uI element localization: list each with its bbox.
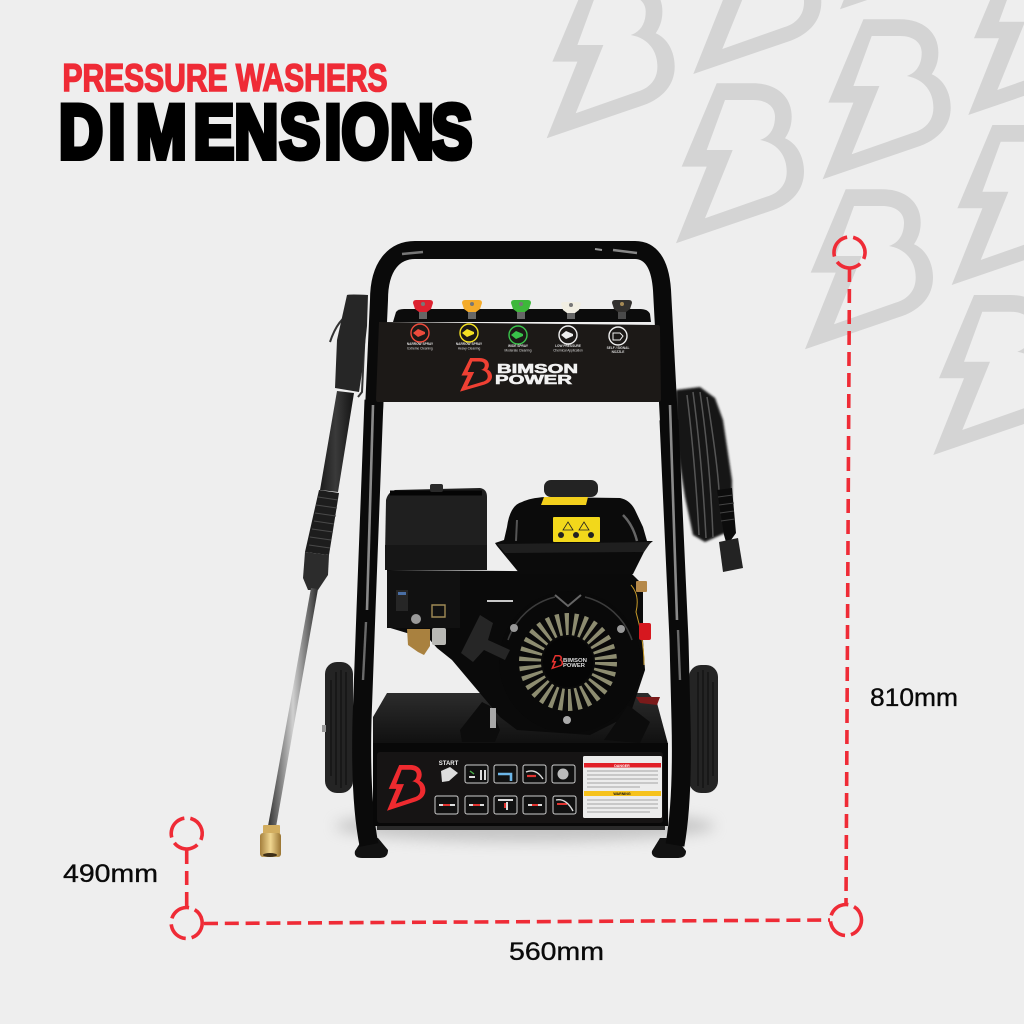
safety label card	[583, 756, 662, 818]
engine	[385, 480, 660, 743]
foot left	[355, 838, 388, 858]
ground shadow	[335, 810, 715, 842]
right wheel	[689, 665, 718, 793]
base plate	[373, 693, 668, 744]
panel lower edge	[377, 826, 665, 830]
title	[59, 57, 472, 175]
bottom control panel	[373, 743, 668, 830]
yellow warning label	[553, 517, 600, 542]
left wheel	[322, 662, 353, 793]
ribbed grip	[305, 490, 339, 555]
spray icon: green: WIDE SPRAY	[508, 344, 529, 348]
label: 810mm: 810mm	[870, 684, 958, 712]
safety label card: DANGER	[614, 764, 630, 768]
grip end cap	[303, 552, 329, 590]
nozzle: white	[561, 302, 581, 319]
red hose fitting	[636, 697, 660, 705]
spray icon: black nozzle: SELF / SIGNAL	[607, 346, 629, 350]
background pattern: logo B marks	[547, 0, 1024, 455]
nozzle: black	[612, 300, 632, 319]
title line: dimensions: DIMENSIONS	[59, 90, 472, 175]
spray icon: red	[407, 324, 434, 350]
yellow strip label	[541, 497, 588, 505]
hose coil	[676, 387, 743, 572]
logo: wordmark: POWER	[495, 372, 573, 387]
label: 560mm: 560mm	[509, 938, 604, 966]
pressure washer product	[260, 249, 743, 858]
spray icon: red: Extreme Cleaning	[407, 346, 433, 350]
spray icon: green	[505, 326, 532, 352]
spray icon: white: LOW PRESSURE	[555, 344, 581, 348]
hub logo: POWER	[563, 663, 585, 669]
nozzle: green	[511, 300, 531, 319]
nozzle: red	[413, 300, 433, 319]
step icons	[435, 765, 576, 814]
engine block silhouette	[387, 570, 645, 735]
spray icon: yellow: Heavy Cleaning	[458, 346, 480, 350]
engine mount left	[460, 702, 500, 742]
hose strain relief	[717, 488, 736, 542]
logo: B mark	[387, 765, 425, 811]
carburettor housing	[387, 571, 460, 628]
yellow wire	[631, 585, 644, 665]
trigger handle	[335, 294, 368, 392]
grey fuel bowl	[432, 628, 446, 645]
frame tube	[362, 249, 681, 845]
foot right	[652, 838, 686, 858]
lance upper tube	[320, 391, 354, 492]
dimension: depth line with circles	[167, 814, 206, 941]
hook bracket	[330, 313, 365, 397]
hose end connector	[719, 538, 743, 572]
carburettor label	[396, 590, 445, 617]
crankcase badge	[487, 600, 513, 602]
nozzle: yellow	[462, 300, 482, 319]
spray icon: black nozzle	[607, 327, 629, 354]
spray icon: yellow	[456, 324, 483, 350]
pull handle	[461, 615, 510, 662]
hub logo: BIMSON	[563, 658, 587, 664]
fuel tank	[495, 480, 653, 574]
recoil starter	[499, 591, 641, 733]
engine mount right	[604, 705, 650, 743]
spray icon: white: Chemical Application	[553, 348, 583, 352]
title line: pressure washers: PRESSURE WASHERS	[62, 57, 388, 100]
brass fuel fitting	[407, 629, 430, 655]
spray icon: red: NARROW SPRAY	[407, 342, 434, 346]
spray icon: black nozzle: NOZZLE	[612, 350, 624, 354]
step icon glyphs	[439, 768, 573, 811]
engine mount left bolt	[490, 708, 496, 728]
nozzle tray	[393, 309, 651, 322]
brass outlet	[636, 581, 647, 592]
logo: wordmark	[495, 361, 578, 387]
spray icon: yellow: NARROW SPRAY	[456, 342, 483, 346]
top control panel	[376, 322, 661, 402]
tank cap	[544, 480, 598, 497]
label: 490mm: 490mm	[63, 860, 158, 888]
spray icon: white	[553, 326, 583, 352]
safety label card: WARNING	[613, 792, 631, 796]
start label: START	[439, 761, 459, 767]
dimension: width line with corner circle	[204, 902, 864, 938]
spray gun and lance	[260, 294, 368, 857]
dimension: height line with end circle	[830, 233, 869, 904]
hub logo	[551, 655, 587, 669]
air filter cover	[385, 484, 487, 570]
carburettor bolt	[411, 614, 421, 624]
brass coupling	[260, 825, 281, 857]
logo: wordmark: BIMSON	[497, 361, 578, 376]
steel rod	[268, 588, 318, 827]
red switch	[639, 623, 651, 640]
spray icon: green: Moderate Cleaning	[505, 348, 532, 352]
start hand icon	[441, 767, 458, 782]
logo: B mark	[460, 358, 492, 392]
